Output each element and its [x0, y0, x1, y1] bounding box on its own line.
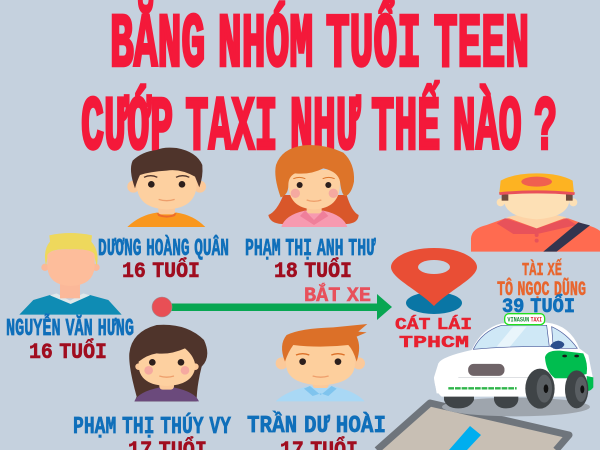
- label: Pham Thi Thuy Vy: [73, 412, 231, 450]
- label: Pham Thi Anh Thu: [245, 236, 376, 284]
- label: Cat Lai TPHCM: CÁT LÁI: [395, 315, 472, 335]
- label: Tran Du Hoai: [247, 411, 386, 450]
- label: driver name: 39 TUỔI: [502, 294, 575, 319]
- label: Bat Xe: BẮT XE: [304, 283, 371, 308]
- label: Cat Lai TPHCM: TPHCM: [399, 334, 469, 353]
- label: Nguyen Van Hung: [6, 313, 134, 365]
- icon: boy Tran Du Hoai: [276, 324, 367, 401]
- icon: location pin: [391, 248, 477, 314]
- icon: taxi driver: [471, 173, 600, 252]
- icon: girl Pham Thi Anh Thu: [268, 145, 359, 227]
- label: Cat Lai TPHCM: [395, 315, 472, 353]
- icon: route arrow: [152, 294, 392, 320]
- label: Nguyen Van Hung: NGUYỄN VĂN HƯNG: [6, 313, 134, 343]
- label: Pham Thi Anh Thu: 18 TUỔI: [274, 257, 352, 284]
- label: Nguyen Van Hung: 16 TUỔI: [29, 338, 107, 365]
- label: Duong Hoang Quan: [98, 235, 229, 284]
- icon: taxi car: [434, 314, 593, 416]
- taxi roof sign: VINASUN: [507, 317, 529, 324]
- label: Pham Thi Anh Thu: PHẠM THỊ ANH THƯ: [245, 236, 376, 263]
- title: [81, 0, 557, 172]
- taxi roof sign: TAXI: [531, 317, 542, 324]
- label: Tran Du Hoai: TRẦN DƯ HOÀI: [247, 411, 386, 440]
- label: Duong Hoang Quan: DƯƠNG HOÀNG QUÂN: [98, 235, 229, 263]
- label: driver name: [497, 258, 586, 319]
- icon: boy Duong Hoang Quan: [127, 148, 206, 227]
- label: Duong Hoang Quan: 16 TUỔI: [122, 257, 200, 284]
- icon: blond boy Nguyen Van Hung: [19, 233, 122, 315]
- icon: tablet map: [377, 403, 569, 450]
- label: driver name: TÀI XẾ: [522, 258, 562, 281]
- taxi roof sign: [505, 314, 545, 325]
- icon: girl Pham Thi Thuy Vy: [129, 325, 207, 401]
- label: Pham Thi Thuy Vy: PHẠM THỊ THÚY VY: [73, 412, 231, 441]
